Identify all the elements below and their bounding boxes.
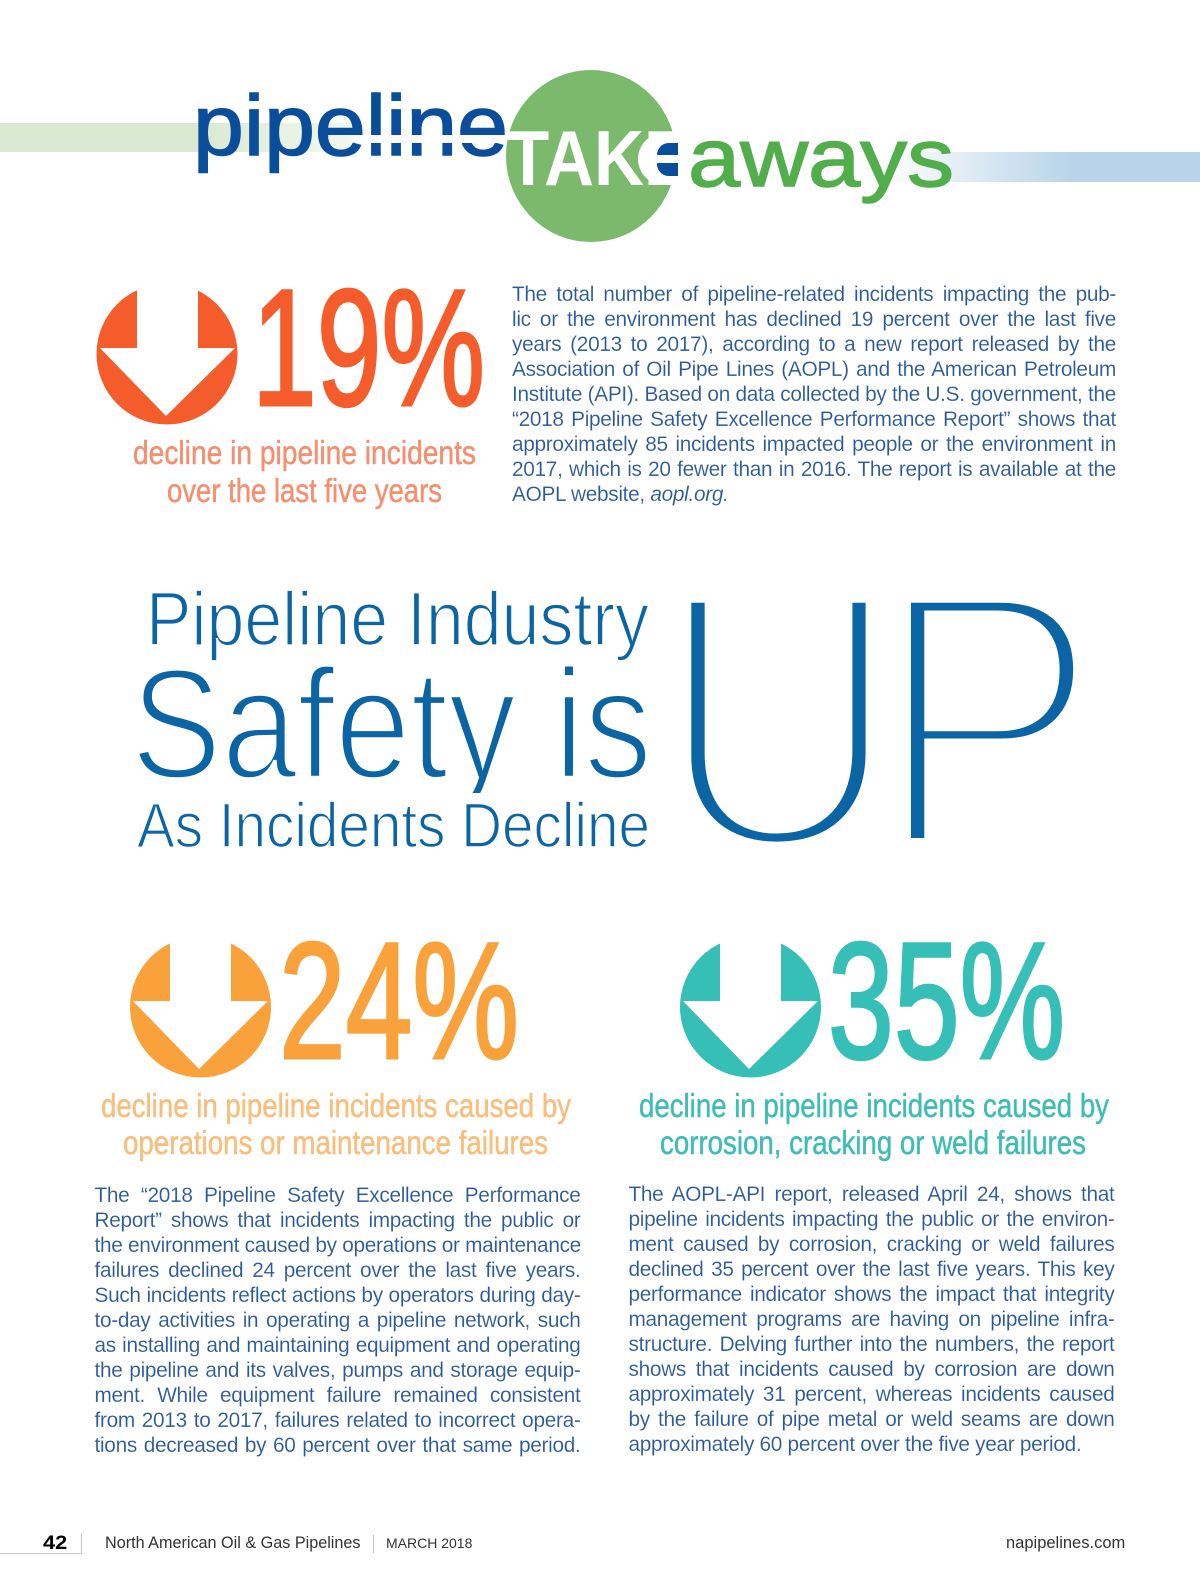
text block: operations and maintenance paragraph: from 2013 to 2017, failures related to incorrect opera-: [94, 1409, 580, 1432]
caption: 19 percent: decline in pipeline incidents: [133, 434, 476, 471]
text block: intro paragraph: Association of Oil Pipe Lines (AOPL) and the American Petroleum: [512, 358, 1116, 381]
text block: intro paragraph: 2017, which is 20 fewer than in 2016. The report is available at the: [512, 458, 1116, 481]
stat: 24 percent: [101, 909, 571, 1161]
caption: 35 percent: corrosion, cracking or weld failures: [660, 1124, 1086, 1161]
text block: operations and maintenance paragraph: tions decreased by 60 percent over that same period.: [94, 1434, 580, 1457]
text block: operations and maintenance paragraph: as installing and maintaining equipment and operating: [94, 1334, 580, 1357]
text block: intro paragraph: Institute (API). Based on data collected by the U.S. government, the: [512, 383, 1116, 406]
text block: corrosion paragraph: [628, 1183, 1115, 1456]
headline line: Safety is: Safety is: [131, 637, 652, 812]
text block: operations and maintenance paragraph: the pipeline and its valves, pumps and storage equip-: [94, 1359, 580, 1382]
green band at left: [0, 123, 352, 152]
icon: amber down arrow: [130, 930, 271, 1078]
word: pipeline: pipeline: [193, 79, 508, 174]
text block: intro paragraph: “2018 Pipeline Safety Excellence Performance Report” shows that: [512, 408, 1116, 431]
text block: corrosion paragraph: management programs are having on pipeline infra-: [628, 1308, 1114, 1331]
masthead: pipeline takeaways logo: [0, 70, 1200, 242]
stat: 35 percent: [639, 909, 1109, 1161]
icon: orange down arrow: [96, 280, 238, 424]
headline line: Pipeline Industry: Pipeline Industry: [146, 577, 649, 662]
headline: pipeline industry safety is up: [131, 513, 1100, 927]
text block: corrosion paragraph: pipeline incidents impacting the public or the environ-: [628, 1208, 1114, 1231]
word: UP: UP: [656, 513, 1100, 927]
text block: operations and maintenance paragraph: The “2018 Pipeline Safety Excellence Performance: [94, 1184, 580, 1207]
text block: intro paragraph: AOPL website, aopl.org.: [512, 483, 729, 506]
text block: operations and maintenance paragraph: the environment caused by operations or maintenance: [94, 1234, 581, 1257]
number: 19%: 19%: [252, 256, 485, 441]
footer: page number: 42: [43, 1533, 67, 1554]
text block: corrosion paragraph: structure. Delving further into the numbers, the report: [628, 1333, 1114, 1356]
word: take: [360, 114, 690, 202]
blue band at right: [880, 152, 1200, 182]
text block: corrosion paragraph: shows that incidents caused by corrosion are down: [628, 1358, 1114, 1381]
number: 24%: 24%: [279, 909, 519, 1094]
word: aways: aways: [688, 111, 954, 204]
word: take: TAKE: [507, 114, 690, 202]
text block: operations and maintenance paragraph: Report” shows that incidents impacting the public or: [94, 1209, 580, 1232]
icon: teal down arrow: [680, 930, 821, 1078]
caption: 24 percent: [101, 1087, 571, 1161]
text block: intro paragraph: lic or the environment has declined 19 percent over the last five: [512, 308, 1116, 331]
text block: corrosion paragraph: approximately 31 percent, whereas incidents caused: [628, 1383, 1114, 1406]
stat: 19 percent: [96, 256, 485, 509]
text block: corrosion paragraph: performance indicator shows the impact that integrity: [628, 1283, 1114, 1306]
green circle: [506, 70, 676, 242]
text block: corrosion paragraph: declined 35 percent over the last five years. This key: [628, 1258, 1114, 1281]
caption: 24 percent: operations or maintenance failures: [123, 1124, 548, 1161]
text block: corrosion paragraph: ment caused by corrosion, cracking or weld failures: [628, 1233, 1114, 1256]
text block: operations and maintenance paragraph: Such incidents reflect actions by operators during day-: [94, 1284, 580, 1307]
footer: publication name: North American Oil & Gas Pipelines: [105, 1534, 361, 1552]
caption: 35 percent: decline in pipeline incidents caused by: [639, 1087, 1109, 1124]
text block: corrosion paragraph: approximately 60 percent over the five year period.: [628, 1433, 1081, 1456]
text block: operations and maintenance paragraph: [94, 1184, 581, 1457]
text block: corrosion paragraph: The AOPL-API report, released April 24, shows that: [628, 1183, 1114, 1206]
caption: 19 percent: over the last five years: [167, 472, 442, 509]
caption: 35 percent: [639, 1087, 1109, 1161]
caption: 19 percent: [133, 434, 476, 509]
number: 35%: 35%: [828, 909, 1065, 1094]
footer: website: napipelines.com: [1006, 1534, 1125, 1552]
text block: intro paragraph: approximately 85 incidents impacted people or the environment in: [512, 433, 1116, 456]
text block: corrosion paragraph: by the failure of pipe metal or weld seams are down: [628, 1408, 1114, 1431]
text block: operations and maintenance paragraph: to-day activities in operating a pipeline network, such: [94, 1309, 580, 1332]
text block: operations and maintenance paragraph: ment. While equipment failure remained consistent: [94, 1384, 580, 1407]
text block: intro paragraph: The total number of pipeline-related incidents impacting the pub-: [512, 283, 1116, 306]
text block: operations and maintenance paragraph: failures declined 24 percent over the last five years.: [94, 1259, 580, 1282]
footer: issue date: MARCH 2018: [386, 1535, 472, 1551]
headline line: As Incidents Decline: As Incidents Decline: [137, 791, 650, 861]
text block: intro paragraph: years (2013 to 2017), according to a new report released by the: [512, 333, 1116, 356]
text block: intro paragraph: [512, 283, 1116, 506]
caption: 24 percent: decline in pipeline incidents caused by: [101, 1087, 571, 1124]
footer rules: [0, 1533, 374, 1554]
